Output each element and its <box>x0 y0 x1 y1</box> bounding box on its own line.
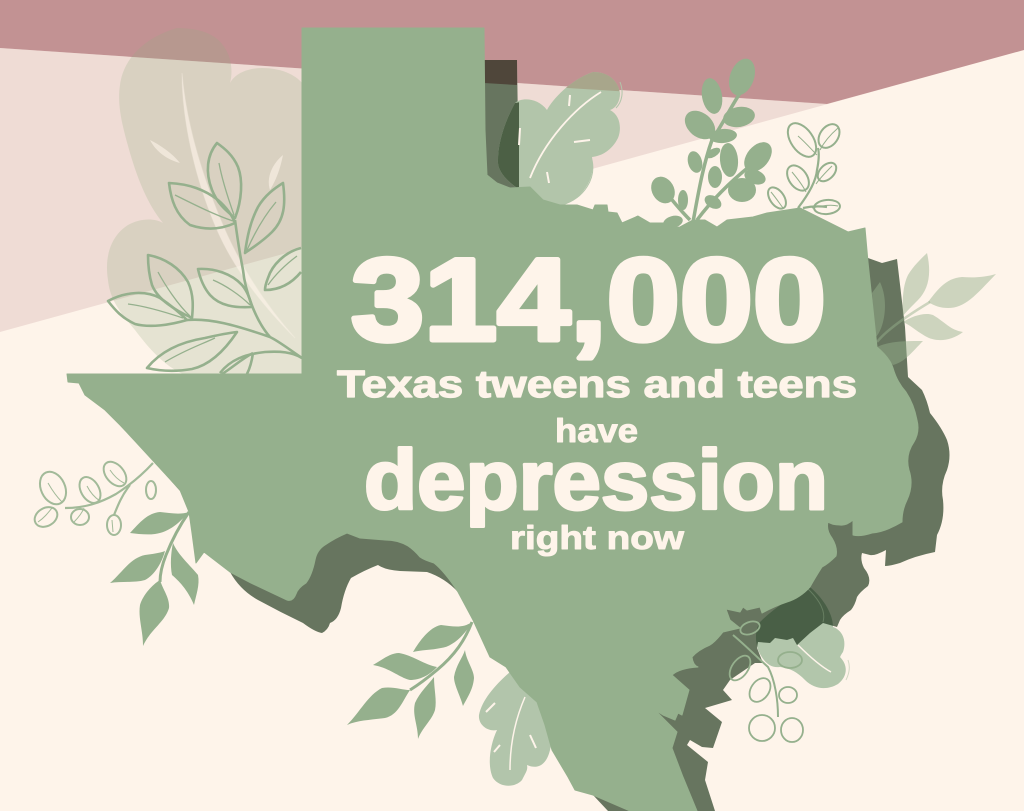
word: have: have <box>555 412 638 449</box>
outlined sprig lower right <box>725 619 803 742</box>
headline number: 314,000 <box>351 234 826 365</box>
transparent leaf sprig right side <box>872 253 996 365</box>
outlined sprig top right <box>764 118 844 215</box>
outlined sprig left <box>31 457 156 535</box>
filled green leaves bottom <box>347 622 474 739</box>
closing words: right now <box>510 519 684 556</box>
shadow of Texas map <box>153 60 950 811</box>
large pale leaf behind panhandle <box>107 28 303 374</box>
transparent leaf top centre <box>498 72 622 207</box>
light leaf lower right <box>756 587 849 688</box>
light leaf bottom centre <box>479 668 551 786</box>
subhead: Texas tweens and teens <box>337 364 857 406</box>
emphasis word: depression: depression <box>364 433 828 527</box>
filled green sprig top <box>646 55 777 230</box>
outlined branch upper left <box>108 143 302 374</box>
filled green leaves left <box>110 512 199 646</box>
